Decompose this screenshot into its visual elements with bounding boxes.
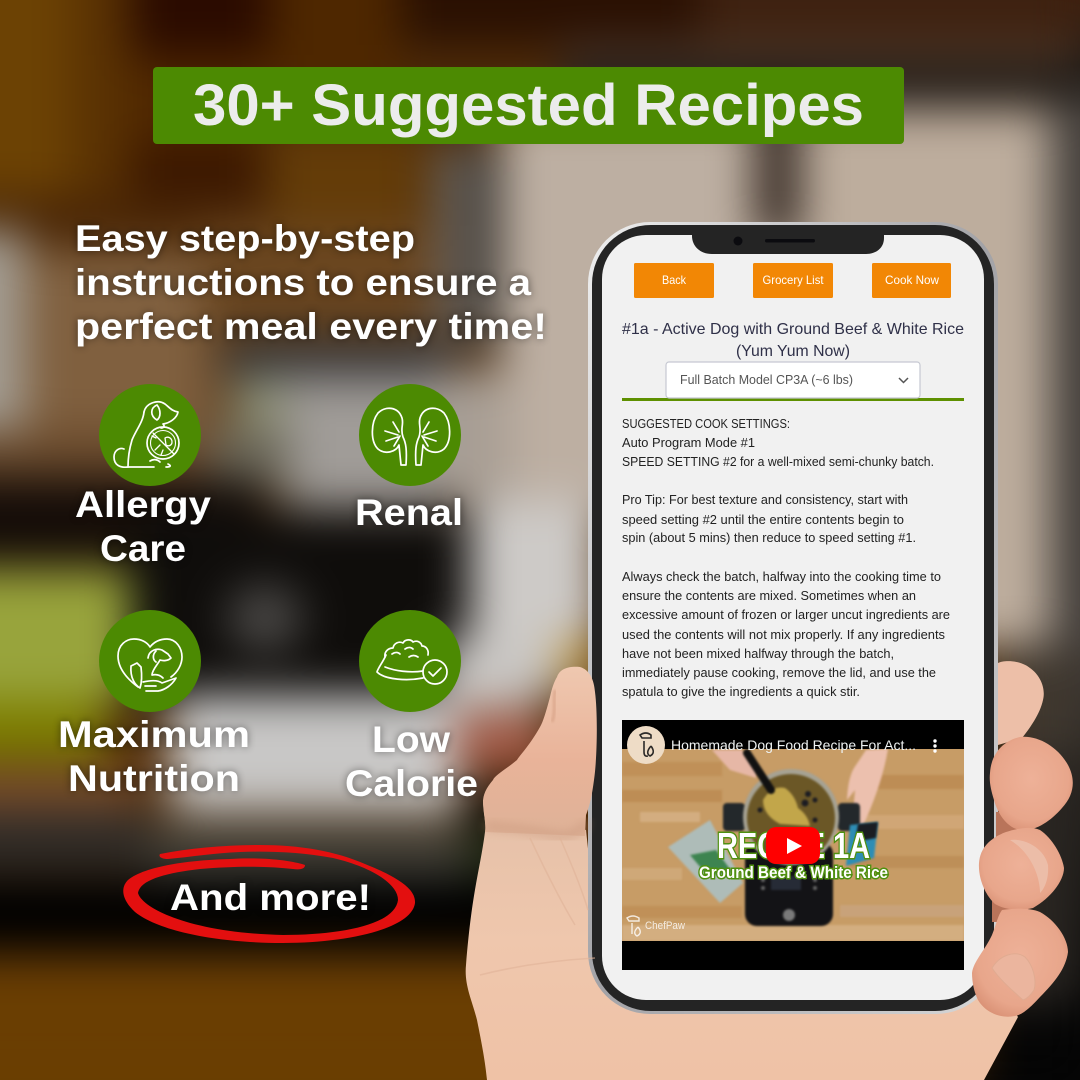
hand: palm behind phone — [466, 800, 1018, 1080]
video title bar — [627, 726, 937, 764]
cook settings text — [622, 417, 934, 469]
thumbnail title text: Ground Beef & White Rice — [699, 863, 888, 882]
label: low calorie: Calorie — [345, 763, 478, 804]
label: allergy care: Allergy — [75, 484, 211, 525]
batch check text: immediately pause cooking, remove the lid, and use the — [622, 666, 936, 680]
label: maximum nutrition: Nutrition — [68, 758, 240, 799]
recipe heading: #1a - Active Dog with Ground Beef & White Rice — [622, 321, 964, 338]
fingernail 3 — [1010, 840, 1048, 893]
phone body — [588, 222, 998, 1014]
pro tip text: spin (about 5 mins) then reduce to speed setting #1. — [622, 531, 916, 545]
button: back — [634, 263, 714, 298]
pro tip text: Pro Tip: For best texture and consistency, start with — [622, 493, 908, 507]
cook settings text: SPEED SETTING #2 for a well-mixed semi-chunky batch. — [622, 455, 934, 469]
screen — [602, 235, 984, 1000]
video embed — [622, 720, 964, 970]
finger 3 — [979, 828, 1064, 910]
ingredient bag — [668, 820, 743, 903]
button: back: Back — [662, 273, 687, 287]
icon: heart with pets and hand — [99, 610, 201, 712]
slow cooker — [723, 753, 860, 926]
thumbnail title text — [699, 825, 888, 882]
intro text: instructions to ensure a — [75, 262, 531, 303]
callout: and more circled in red — [123, 845, 415, 943]
label: low calorie — [345, 719, 478, 804]
intro text: perfect meal every time! — [75, 306, 547, 347]
pro tip text: speed setting #2 until the entire contents begin to — [622, 513, 904, 527]
notch — [692, 232, 884, 254]
recipe heading: (Yum Yum Now) — [736, 343, 850, 360]
cook settings text: Auto Program Mode #1 — [622, 436, 755, 450]
finger 2 — [990, 737, 1073, 830]
finger 4 — [972, 909, 1068, 1017]
shadow between fingers — [992, 812, 1028, 922]
phone — [588, 222, 998, 1014]
batch check text: have not been mixed halfway through the batch, — [622, 647, 894, 661]
intro text — [75, 218, 547, 347]
batch dropdown: Full Batch Model CP3A (~6 lbs) — [680, 373, 853, 387]
batch check text: spatula to give the ingredients a quick stir. — [622, 685, 860, 699]
ingredient box — [846, 822, 878, 866]
icon: food bowl with check — [359, 610, 461, 712]
icon: allergy care dog — [99, 384, 201, 486]
recipe heading — [622, 321, 964, 360]
title banner: 30+ Suggested Recipes — [193, 73, 864, 138]
intro text: Easy step-by-step — [75, 218, 415, 259]
button: grocery list — [753, 263, 833, 298]
chefpaw watermark — [627, 916, 685, 936]
hand: fingers — [972, 661, 1073, 1017]
chefpaw watermark: ChefPaw — [645, 920, 685, 932]
red hand-drawn ellipse — [123, 845, 415, 943]
green divider — [622, 398, 964, 401]
batch check text: used the contents will not mix properly. If any ingredients — [622, 628, 945, 642]
hand: thumb — [480, 667, 597, 975]
label: renal: Renal — [355, 492, 463, 533]
video title bar: Homemade Dog Food Recipe For Act... — [671, 737, 916, 753]
batch check text: ensure the contents are mixed. Sometimes when an — [622, 589, 916, 603]
batch check text: Always check the batch, halfway into the cooking time to — [622, 570, 941, 584]
batch check text: excessive amount of frozen or larger uncut ingredients are — [622, 608, 950, 622]
pro tip text — [622, 493, 916, 545]
finger 1 — [998, 661, 1044, 745]
label: low calorie: Low — [372, 719, 450, 760]
cook settings text: SUGGESTED COOK SETTINGS: — [622, 417, 790, 431]
wood counter — [622, 749, 964, 941]
icon: play button — [766, 827, 820, 864]
label: allergy care — [75, 484, 211, 569]
batch dropdown — [666, 362, 920, 398]
button: cook now: Cook Now — [885, 273, 939, 287]
fingernail 4 — [992, 954, 1035, 1000]
callout: and more circled in red: And more! — [170, 877, 371, 918]
label: allergy care: Care — [100, 528, 186, 569]
button: cook now — [872, 263, 951, 298]
thumbnail title text: RECIPE 1A — [717, 825, 870, 866]
label: maximum nutrition: Maximum — [58, 714, 250, 755]
label: maximum nutrition — [58, 714, 250, 799]
icon: kidneys — [359, 384, 461, 486]
batch check text — [622, 570, 950, 699]
button: grocery list: Grocery List — [762, 273, 824, 287]
